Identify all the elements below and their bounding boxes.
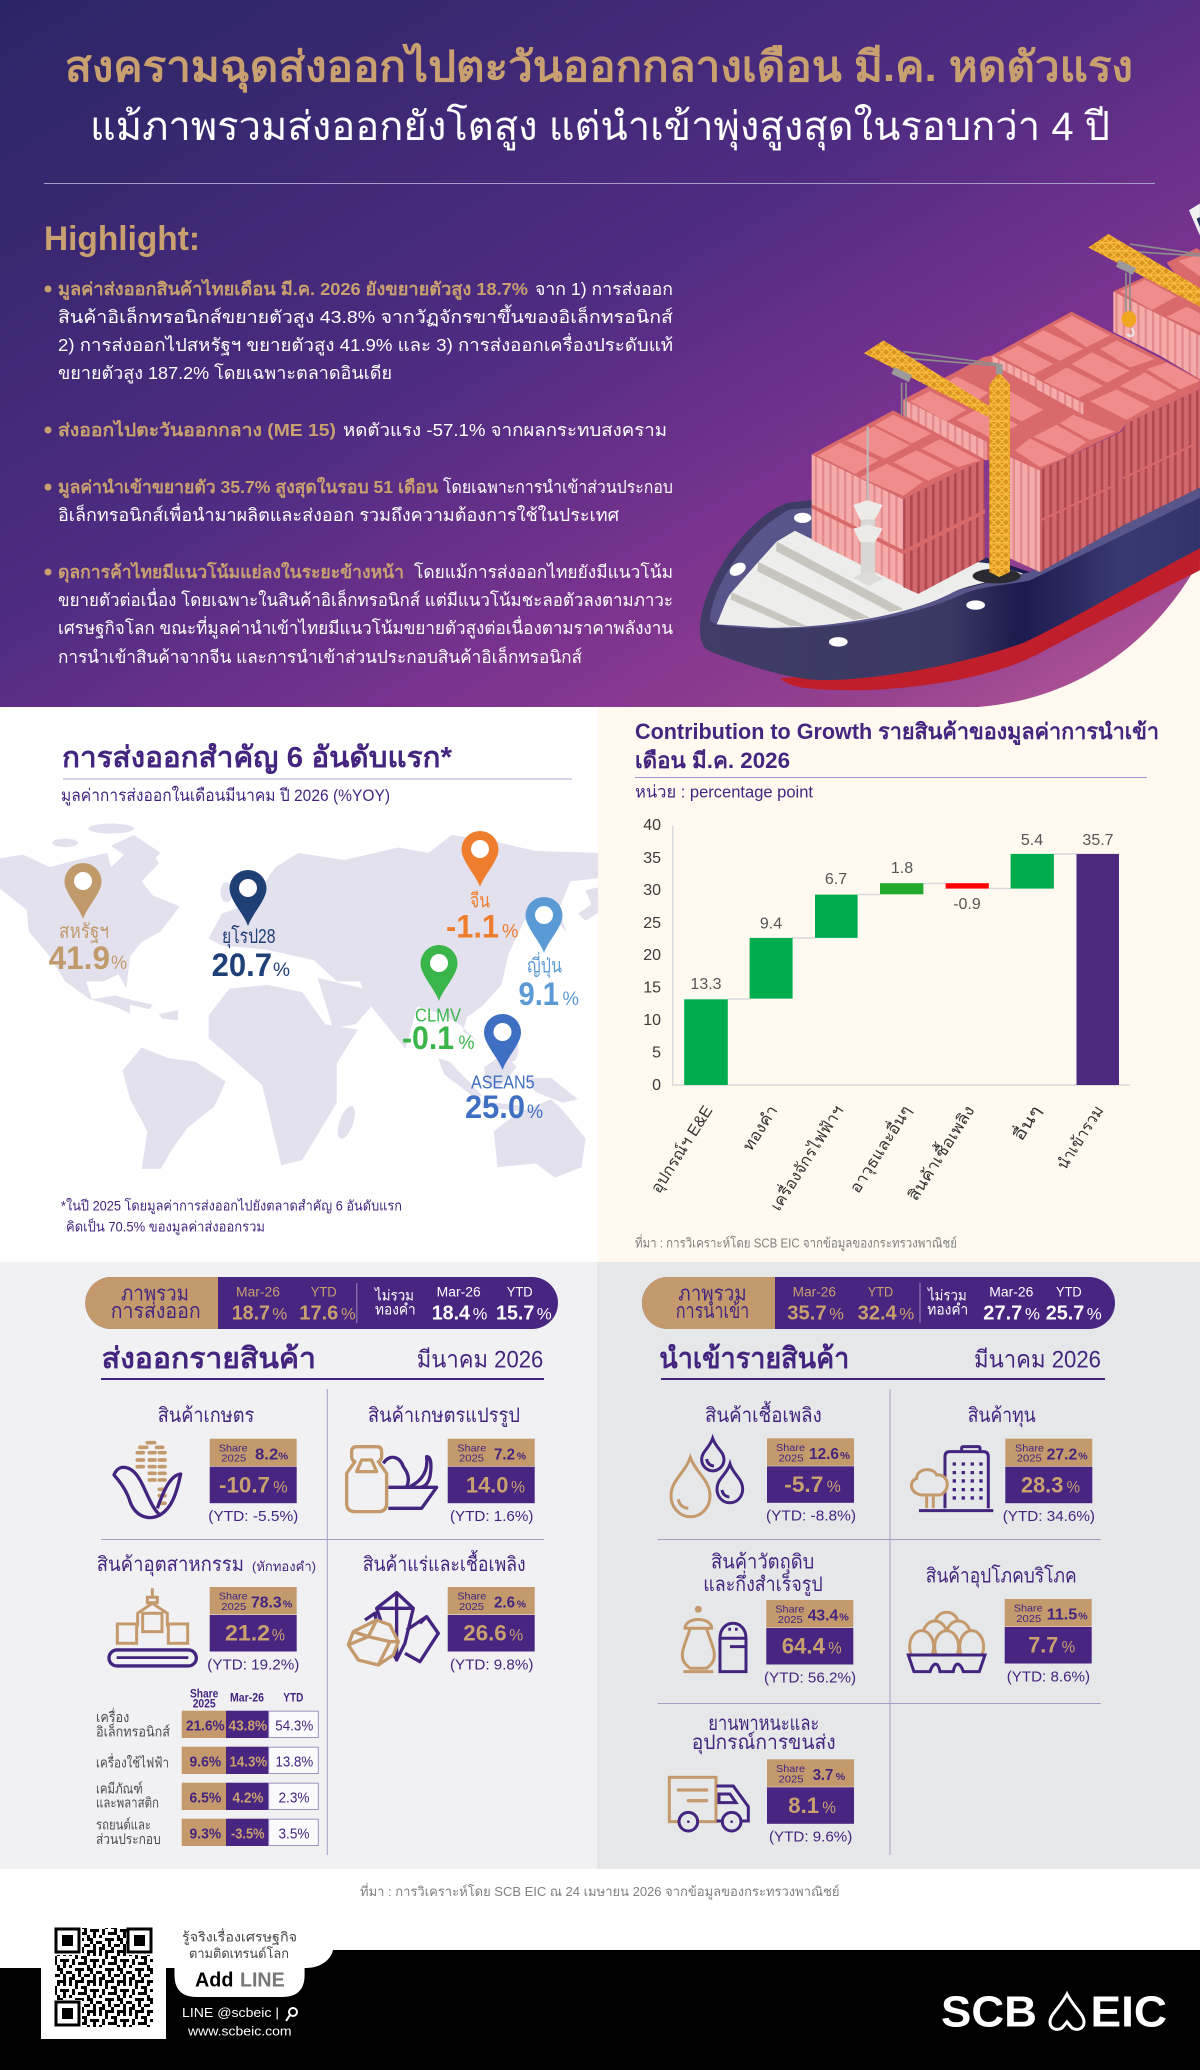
- row: chemicals and plastics: เคมีภัณฑ์: [96, 1780, 143, 1796]
- footnote: *ในปี 2025 โดยมูลค่าการส่งออกไปยังตลาดสำคัญ 6 อันดับแรก: [61, 1198, 402, 1215]
- title line 1: สงครามฉุดส่งออกไปตะวันออกกลางเดือน มี.ค. หดตัวแรง: [65, 42, 1133, 93]
- row: chemicals and plastics: [96, 1780, 318, 1811]
- stat box: 26.6: [463, 1621, 507, 1646]
- stat box: Share: [219, 1591, 248, 1603]
- stat box: Share: [776, 1763, 805, 1775]
- summary pill: exports: [85, 1277, 558, 1329]
- marker: Japan: %: [562, 989, 579, 1010]
- bullet: middle east: [44, 419, 667, 440]
- row: electronics: 21.6%: [186, 1719, 225, 1735]
- icon: oil drops: [671, 1438, 743, 1517]
- crane 1: [864, 340, 1021, 583]
- row: chemicals and plastics: 6.5%: [190, 1791, 221, 1807]
- icon: shakers: [682, 1607, 746, 1672]
- summary pill: exports: การส่งออก: [111, 1300, 201, 1323]
- table: manufacturing breakdown: [96, 1689, 318, 1847]
- row: appliances: 9.6%: [190, 1755, 221, 1771]
- stat box: %: [1067, 1477, 1080, 1496]
- waterfall chart: นำเข้ารวม: [1054, 1102, 1107, 1173]
- bullet: exports: สินค้าอิเล็กทรอนิกส์ขยายตัวสูง 43.8% จากวัฏจักรขาขึ้นของอิเล็กทรอนิกส์: [58, 304, 673, 328]
- stat box: [207, 1587, 299, 1673]
- stat box: %: [272, 1626, 285, 1645]
- stat box: 2025: [459, 1453, 484, 1465]
- summary pill: exports: 15.7: [496, 1302, 534, 1324]
- cell: manufacturing: (หักทองคำ): [252, 1559, 316, 1574]
- summary pill: imports: การนำเข้า: [676, 1300, 749, 1323]
- marker: CLMV: -0.1: [402, 1020, 454, 1056]
- bullet: imports: โดยเฉพาะการนำเข้าส่วนประกอบ: [443, 477, 673, 497]
- bullet: trade balance: [44, 561, 673, 667]
- stat box: [448, 1439, 535, 1525]
- stat box: %: [822, 1798, 836, 1817]
- cell: fuel: [671, 1401, 856, 1525]
- illustration: container ship: [700, 204, 1200, 690]
- tagline: รู้จริงเรื่องเศรษฐกิจ: [182, 1929, 297, 1946]
- icon: milk and fruit: [347, 1447, 437, 1512]
- contact: www.scbeic.com: [187, 2024, 292, 2039]
- bullet: exports: ขยายตัวสูง 187.2% โดยเฉพาะตลาดอินเดีย: [58, 363, 392, 384]
- row: chemicals and plastics: และพลาสติก: [96, 1795, 159, 1811]
- deck tower: [853, 427, 883, 586]
- summary pill: imports: YTD: [868, 1285, 894, 1300]
- front container stack: [812, 454, 918, 594]
- marker: Europe: %: [273, 960, 290, 981]
- summary pill: exports: 18.7: [232, 1302, 270, 1324]
- table: manufacturing breakdown: Share: [190, 1689, 218, 1701]
- bullet: imports: อิเล็กทรอนิกส์เพื่อนำมาผลิตและส่งออก รวมถึงความต้องการใช้ในประเทศ: [58, 503, 619, 525]
- marker: ASEAN5: 25.0: [465, 1089, 525, 1125]
- waterfall chart: 6.7: [825, 871, 847, 888]
- bullet: exports: 2) การส่งออกไปสหรัฐฯ ขยายตัวสูง 41.9% และ 3) การส่งออกเครื่องประดับแท้: [58, 333, 673, 356]
- summary pill: exports: ทองคำ: [375, 1301, 416, 1318]
- stat box: Share: [1015, 1442, 1044, 1454]
- bullet: trade balance: ดุลการค้าไทยมีแนวโน้มแย่ลงในระยะข้างหน้า: [58, 561, 404, 583]
- stat box: 2.6: [494, 1595, 515, 1612]
- icon: conveyor: [109, 1588, 196, 1666]
- summary pill: exports: ไม่รวม: [374, 1287, 414, 1305]
- summary pill: exports: ภาพรวม: [121, 1283, 189, 1306]
- stat box: 14.0: [466, 1472, 508, 1497]
- bullet: middle east: หดตัวแรง -57.1% จากผลกระทบสงคราม: [343, 420, 667, 440]
- waterfall chart: สินค้าเชื้อเพลิง: [902, 1101, 978, 1204]
- stat box: (YTD: 9.6%): [769, 1829, 852, 1846]
- row: electronics: เครื่อง: [96, 1708, 129, 1725]
- stat box: 3.7: [813, 1767, 833, 1784]
- stat box: 43.4: [808, 1608, 839, 1625]
- footnote: คิดเป็น 70.5% ของมูลค่าส่งออกรวม: [66, 1217, 265, 1235]
- summary pill: imports: ทองคำ: [927, 1301, 968, 1318]
- marker: United States: [49, 863, 127, 976]
- summary pill: exports: Mar-26: [236, 1285, 280, 1300]
- summary pill: imports: Mar-26: [989, 1285, 1033, 1300]
- cell: raw materials: [682, 1551, 856, 1686]
- stat box: %: [509, 1626, 523, 1645]
- cell: consumer goods: สินค้าอุปโภคบริโภค: [926, 1565, 1077, 1589]
- heading: highlight: Highlight:: [44, 220, 200, 258]
- stat box: 8.2: [255, 1446, 278, 1463]
- stat box: [208, 1439, 298, 1525]
- stat box: (YTD: 9.8%): [450, 1656, 533, 1673]
- bullet: imports: [44, 476, 673, 525]
- waterfall chart: 35: [643, 850, 661, 867]
- row: electronics: 54.3%: [275, 1719, 313, 1735]
- stat box: 12.6: [809, 1446, 839, 1463]
- stat box: 64.4: [782, 1634, 826, 1659]
- summary pill: imports: Mar-26: [793, 1285, 836, 1300]
- heading: contribution: เดือน มี.ค. 2026: [635, 748, 790, 773]
- world map: [0, 824, 600, 1178]
- icon: gems: [348, 1593, 438, 1665]
- row: autos and parts: [96, 1816, 318, 1847]
- stat box: 2025: [459, 1601, 484, 1613]
- marker: Europe: ยุโรป28: [222, 925, 276, 949]
- marker: China: จีน: [470, 890, 490, 912]
- stat box: 2025: [778, 1452, 804, 1464]
- stat box: 8.1: [788, 1793, 819, 1818]
- summary pill: exports: YTD: [311, 1285, 337, 1300]
- summary pill: exports: %: [473, 1304, 487, 1323]
- bullet: trade balance: ขยายตัวต่อเนื่อง โดยเฉพาะในสินค้าอิเล็กทรอนิกส์ แต่มีแนวโน้มชะลอตัวลงตามภาวะ: [58, 588, 673, 610]
- cell: minerals and fuel: สินค้าแร่และเชื้อเพลิง: [363, 1550, 526, 1576]
- stat box: -10.7: [219, 1472, 270, 1497]
- heading: exports by product: ส่งออกรายสินค้า: [102, 1343, 316, 1375]
- stat box: 2025: [778, 1773, 804, 1785]
- footnote: [61, 1198, 402, 1235]
- date: imports: มีนาคม 2026: [974, 1346, 1101, 1374]
- stat box: 7.2: [494, 1446, 515, 1463]
- waterfall chart: -0.9: [953, 896, 981, 913]
- panel: exports by product: [0, 1262, 597, 1869]
- bullet: exports: [44, 278, 673, 384]
- stat box: (YTD: -5.5%): [208, 1508, 298, 1525]
- waterfall chart: 9.4: [760, 916, 782, 933]
- stat box: [764, 1600, 856, 1686]
- back container stack top: [903, 312, 1200, 471]
- waterfall chart: [643, 817, 1130, 1214]
- panel: footer: [0, 1920, 1200, 2070]
- summary pill: imports: ภาพรวม: [678, 1283, 747, 1306]
- stat box: %: [1078, 1451, 1088, 1462]
- contact: [182, 2005, 297, 2039]
- cell: capital goods: สินค้าทุน: [968, 1405, 1036, 1428]
- row: autos and parts: ส่วนประกอบ: [96, 1831, 161, 1847]
- stat box: %: [836, 1772, 845, 1783]
- stat box: (YTD: 56.2%): [764, 1669, 856, 1686]
- bullet: exports: จาก 1) การส่งออก: [535, 279, 673, 299]
- table: manufacturing breakdown: 2025: [193, 1698, 216, 1710]
- stat box: 2025: [778, 1614, 803, 1626]
- row: electronics: [96, 1708, 318, 1740]
- summary pill: exports: 18.4: [432, 1302, 471, 1324]
- stat box: %: [511, 1477, 525, 1496]
- heading: top six: การส่งออกสำคัญ 6 อันดับแรก*: [62, 742, 453, 775]
- row: autos and parts: 9.3%: [190, 1827, 221, 1843]
- cell: raw materials: สินค้าวัตถุดิบ: [711, 1551, 814, 1574]
- logo: SCB EIC: [941, 1988, 1167, 2037]
- tagline: ตามติดเทรนด์โลก: [189, 1946, 289, 1961]
- marker: CLMV: %: [458, 1033, 475, 1054]
- summary pill: imports: 27.7: [983, 1302, 1022, 1324]
- bullet: trade balance: เศรษฐกิจโลก ขณะที่มูลค่านำเข้าไทยมีแนวโน้มขยายตัวสูงต่อเนื่องตามราคาพลังงาน: [58, 616, 673, 639]
- row: chemicals and plastics: 2.3%: [278, 1791, 310, 1807]
- cell: agriculture: สินค้าเกษตร: [158, 1405, 255, 1427]
- summary pill: imports: ไม่รวม: [927, 1287, 967, 1305]
- stat box: %: [840, 1451, 850, 1462]
- stat box: %: [839, 1613, 849, 1624]
- stat box: Share: [776, 1442, 805, 1454]
- stat box: Share: [1014, 1603, 1043, 1615]
- tagline: [182, 1929, 297, 1961]
- add line button: LINE: [240, 1970, 285, 1992]
- stat box: (YTD: 8.6%): [1007, 1668, 1090, 1685]
- marker: Europe: 20.7: [212, 947, 272, 983]
- stat box: (YTD: 34.6%): [1003, 1508, 1095, 1525]
- row: electronics: อิเล็กทรอนิกส์: [96, 1723, 170, 1740]
- stat box: 7.7: [1028, 1633, 1058, 1658]
- waterfall chart: 40: [643, 817, 661, 834]
- row: electronics: 43.8%: [228, 1719, 267, 1735]
- cell: processed agriculture: สินค้าเกษตรแปรรูป: [368, 1405, 520, 1428]
- waterfall chart: 35.7: [1082, 832, 1114, 849]
- icon: egg tray: [908, 1612, 985, 1672]
- marker: ASEAN5: [465, 1014, 543, 1125]
- row: autos and parts: -3.5%: [231, 1827, 265, 1843]
- summary pill: imports: %: [899, 1304, 914, 1323]
- marker: United States: %: [111, 953, 127, 974]
- stat box: 27.2: [1047, 1446, 1077, 1463]
- waterfall chart: 13.3: [690, 976, 722, 993]
- marker: Japan: ญี่ปุ่น: [527, 952, 562, 978]
- stat box: Share: [219, 1442, 248, 1454]
- panel: imports by product: [597, 1262, 1200, 1869]
- stat box: [448, 1587, 535, 1673]
- waterfall chart: 0: [652, 1077, 661, 1094]
- marker: China: [446, 831, 519, 944]
- waterfall chart: 15: [643, 980, 661, 996]
- waterfall chart: อื่นๆ: [1007, 1101, 1045, 1144]
- summary pill: exports: 17.6: [299, 1302, 338, 1324]
- heading: contribution: Contribution to Growth รายสินค้าของมูลค่าการนำเข้า: [635, 719, 1159, 746]
- stat box: [766, 1438, 856, 1525]
- summary pill: imports: %: [829, 1304, 844, 1323]
- summary pill: exports: %: [341, 1304, 356, 1323]
- panel: header highlights: [0, 0, 1200, 707]
- cell: minerals and fuel: [348, 1550, 535, 1673]
- cell: processed agriculture: [347, 1405, 535, 1525]
- marker: ASEAN5: %: [527, 1102, 543, 1123]
- stat box: (YTD: 19.2%): [207, 1656, 299, 1673]
- cell: vehicles: [669, 1713, 854, 1846]
- logo: SCB EIC: SCB: [941, 1988, 1037, 2037]
- marker: CLMV: [402, 945, 475, 1056]
- stat box: %: [1062, 1638, 1075, 1657]
- stat box: 28.3: [1021, 1472, 1063, 1497]
- waterfall chart: 5.4: [1021, 832, 1043, 849]
- stat box: 2025: [1016, 1613, 1041, 1625]
- marker: China: %: [502, 922, 519, 942]
- add line button: [174, 1966, 305, 1997]
- summary pill: imports: 35.7: [787, 1302, 827, 1324]
- summary pill: exports: Mar-26: [437, 1285, 481, 1300]
- icon: truck: [669, 1777, 748, 1831]
- waterfall chart: 30: [643, 882, 661, 899]
- panel: top six export markets: [0, 707, 600, 1262]
- waterfall chart: อาวุธและอื่นๆ: [844, 1101, 916, 1197]
- waterfall chart: 1.8: [891, 860, 913, 877]
- row: autos and parts: 3.5%: [278, 1827, 310, 1843]
- summary pill: imports: YTD: [1056, 1285, 1082, 1300]
- stat box: 78.3: [251, 1595, 282, 1612]
- summary pill: exports: %: [272, 1304, 287, 1323]
- panel: contribution to growth: [598, 707, 1200, 1262]
- marker: Japan: [518, 897, 579, 1012]
- stat box: %: [517, 1600, 526, 1611]
- stat box: 11.5: [1047, 1607, 1078, 1624]
- stat box: 2025: [221, 1601, 246, 1613]
- bullet: trade balance: การนำเข้าสินค้าจากจีน และการนำเข้าส่วนประกอบสินค้าอิเล็กทรอนิกส์: [58, 646, 582, 667]
- row: appliances: [96, 1747, 318, 1774]
- icon: building and tree: [911, 1447, 993, 1511]
- right container stacks: [1010, 457, 1040, 572]
- source: footer: ที่มา : การวิเคราะห์โดย SCB EIC ณ 24 เมษายน 2026 จากข้อมูลของกระทรวงพาณิชย์: [360, 1883, 840, 1900]
- stat box: %: [278, 1451, 288, 1462]
- row: appliances: 13.8%: [276, 1755, 313, 1771]
- marker: China: -1.1: [446, 908, 499, 944]
- stat box: Share: [775, 1604, 804, 1616]
- stat box: (YTD: -8.8%): [766, 1508, 856, 1525]
- row: autos and parts: รถยนต์และ: [96, 1816, 151, 1832]
- waterfall chart: ทองคำ: [740, 1103, 781, 1154]
- summary pill: imports: [642, 1277, 1115, 1329]
- cell: fuel: สินค้าเชื้อเพลิง: [705, 1401, 822, 1427]
- heading: imports by product: นำเข้ารายสินค้า: [659, 1343, 849, 1375]
- bullet: exports: มูลค่าส่งออกสินค้าไทยเดือน มี.ค. 2026 ยังขยายตัวสูง 18.7%: [58, 278, 528, 301]
- cell: manufacturing: [97, 1554, 316, 1673]
- summary pill: exports: %: [537, 1304, 552, 1323]
- stat box: %: [283, 1600, 292, 1611]
- stat box: (YTD: 1.6%): [450, 1508, 533, 1525]
- stat box: 21.2: [225, 1621, 270, 1646]
- unit label: หน่วย : percentage point: [635, 782, 813, 802]
- waterfall chart: 20: [643, 947, 661, 964]
- stat box: Share: [457, 1442, 486, 1454]
- far-back containers: [1113, 291, 1160, 356]
- cell: consumer goods: [908, 1565, 1092, 1685]
- summary pill: exports: YTD: [507, 1285, 533, 1300]
- stat box: [1005, 1599, 1092, 1685]
- waterfall chart: อุปกรณ์ฯ E&E: [647, 1102, 717, 1197]
- waterfall chart: 25: [643, 915, 661, 932]
- row: appliances: 14.3%: [230, 1755, 267, 1771]
- marker: Europe: [212, 870, 290, 983]
- bullet: trade balance: โดยแม้การส่งออกไทยยังมีแนวโน้ม: [414, 562, 673, 582]
- stat box: %: [1078, 1612, 1088, 1623]
- marker: Japan: 9.1: [518, 976, 559, 1012]
- marker: CLMV: CLMV: [415, 1005, 461, 1025]
- bullet: middle east: ส่งออกไปตะวันออกกลาง (ME 15): [58, 419, 336, 440]
- icon: corn: [114, 1443, 181, 1518]
- table: manufacturing breakdown: Mar-26: [230, 1692, 264, 1704]
- add line button: Add: [195, 1970, 233, 1992]
- row: chemicals and plastics: 4.2%: [232, 1791, 264, 1807]
- cell: capital goods: [911, 1405, 1095, 1525]
- summary pill: imports: 25.7: [1046, 1302, 1084, 1324]
- summary pill: imports: %: [1025, 1304, 1040, 1323]
- logo: SCB EIC: EIC: [1090, 1988, 1167, 2037]
- summary pill: imports: 32.4: [858, 1302, 898, 1324]
- stat box: Share: [457, 1591, 486, 1603]
- stat box: %: [273, 1477, 288, 1496]
- waterfall chart: 10: [643, 1012, 661, 1029]
- table: manufacturing breakdown: YTD: [283, 1692, 303, 1704]
- heading: contribution: [635, 719, 1159, 773]
- stat box: -5.7: [784, 1472, 823, 1497]
- cell: agriculture: [114, 1405, 298, 1525]
- stat box: [767, 1759, 854, 1846]
- stat box: 2025: [221, 1453, 246, 1465]
- cell: raw materials: และกึ่งสำเร็จรูป: [703, 1570, 823, 1597]
- waterfall chart: 5: [652, 1044, 661, 1062]
- stat box: %: [517, 1451, 526, 1462]
- crane 2: [1088, 204, 1200, 336]
- marker: United States: 41.9: [49, 940, 110, 976]
- date: exports: มีนาคม 2026: [417, 1346, 543, 1374]
- subtitle: top six: มูลค่าการส่งออกในเดือนมีนาคม ปี 2026 (%YOY): [61, 785, 390, 806]
- contact: LINE @scbeic |: [182, 2005, 279, 2020]
- stat box: [1003, 1439, 1095, 1525]
- waterfall chart: เครื่องจักรไฟฟ้าฯ: [765, 1101, 847, 1214]
- white tab: [166, 1920, 333, 1968]
- row: appliances: เครื่องใช้ไฟฟ้า: [96, 1753, 169, 1770]
- summary pill: imports: %: [1087, 1304, 1102, 1323]
- marker: ASEAN5: ASEAN5: [471, 1073, 535, 1093]
- bullet: imports: มูลค่านำเข้าขยายตัว 35.7% สูงสุดในรอบ 51 เดือน: [58, 476, 438, 499]
- marker: United States: สหรัฐฯ: [59, 921, 109, 943]
- stat box: 2025: [1017, 1453, 1042, 1465]
- cell: manufacturing: สินค้าอุตสาหกรรม: [97, 1554, 244, 1577]
- cell: vehicles: ยานพาหนะและ: [708, 1713, 819, 1735]
- stat box: %: [827, 1477, 841, 1496]
- stat box: %: [828, 1639, 842, 1658]
- QR card: [41, 1920, 166, 2039]
- source: ที่มา : การวิเคราะห์โดย SCB EIC จากข้อมูลของกระทรวงพาณิชย์: [635, 1234, 957, 1252]
- title line 2: แม้ภาพรวมส่งออกยังโตสูง แต่นำเข้าพุ่งสูงสุดในรอบกว่า 4 ปี: [90, 103, 1110, 151]
- cell: vehicles: อุปกรณ์การขนส่ง: [692, 1731, 836, 1755]
